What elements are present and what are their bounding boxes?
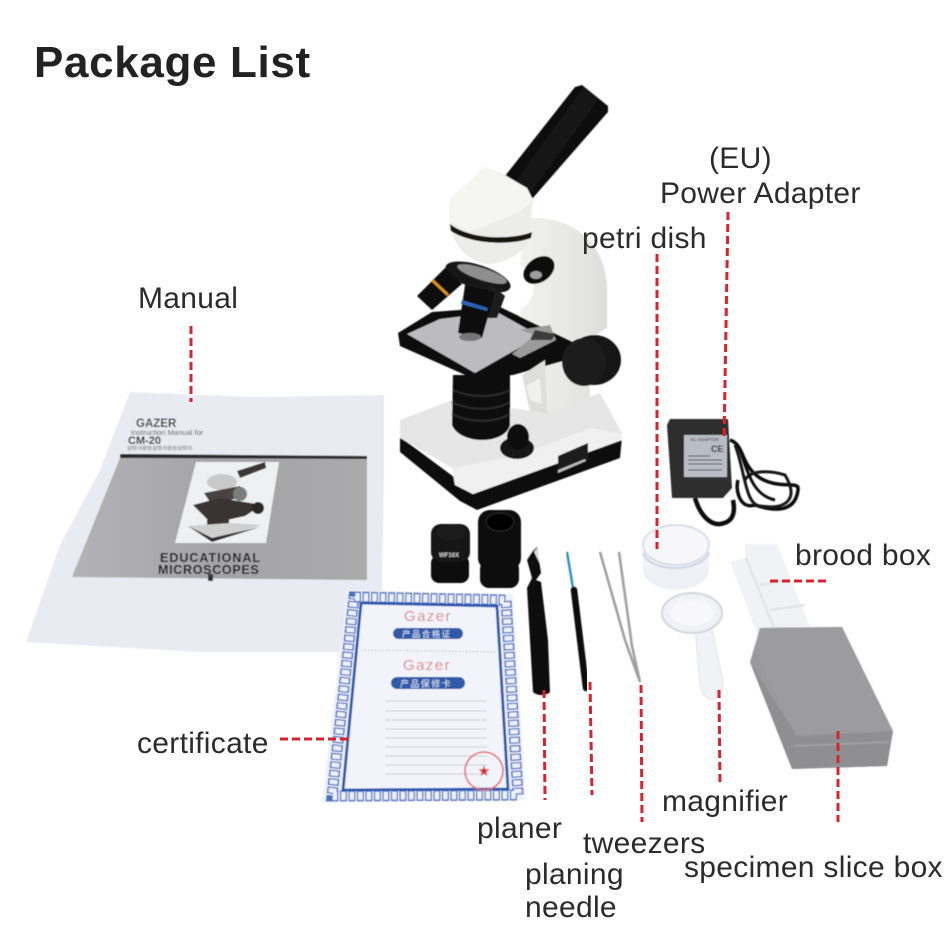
label: planing needle: planing <box>525 858 624 891</box>
certificate: Gazer <box>404 608 452 625</box>
label: EU Power Adapter: (EU) <box>709 142 772 175</box>
label: planing needle: needle <box>525 891 617 924</box>
microscope <box>398 85 622 510</box>
leader: brood box <box>770 580 826 582</box>
side knob small <box>518 250 560 290</box>
manual booklet: MICROSCOPES <box>158 563 259 577</box>
magnifier <box>662 593 723 699</box>
eyepieces <box>431 510 521 588</box>
petri dish <box>643 525 709 590</box>
planer tool <box>527 547 550 695</box>
head <box>450 167 533 264</box>
leader: power adapter <box>724 212 728 440</box>
leader: magnifier <box>719 690 720 785</box>
objectives <box>417 268 462 310</box>
manual booklet: 说明书使用说明书使用说明书 <box>127 445 192 452</box>
certificate <box>322 590 526 803</box>
planing needle <box>567 552 586 688</box>
stage clip <box>512 325 556 358</box>
slider white <box>522 360 548 420</box>
eyepieces: WF16X <box>439 553 459 559</box>
manual booklet: Instruction Manual for <box>131 428 204 437</box>
specimen slice box <box>750 627 893 769</box>
label: planer: planer <box>477 812 562 845</box>
base knob <box>500 437 534 459</box>
tweezers <box>600 552 640 682</box>
leader: Manual <box>190 326 192 402</box>
title: Package List <box>34 38 311 87</box>
label: specimen slice box: specimen slice box <box>684 851 943 884</box>
leader: tweezers <box>641 685 642 822</box>
stage <box>398 307 575 378</box>
label: brood box: brood box <box>795 539 931 572</box>
power adapter <box>667 419 798 524</box>
certificate: Gazer <box>403 657 451 674</box>
power adapter: CE <box>711 444 724 454</box>
leader: certificate <box>280 738 348 740</box>
ribbed column <box>452 375 510 440</box>
manual cover microscope <box>188 462 266 542</box>
base top <box>400 393 622 494</box>
certificate: 产品合格证 <box>402 629 452 639</box>
focus knob <box>567 335 621 385</box>
manual booklet: GAZER <box>136 418 177 430</box>
eyepiece tube <box>505 85 608 199</box>
label: magnifier: magnifier <box>662 785 788 818</box>
label: EU Power Adapter: Power Adapter <box>660 177 861 210</box>
leader: petri dish <box>656 254 658 549</box>
power adapter: AC ADAPTOR <box>690 437 720 442</box>
nosepiece <box>442 255 514 299</box>
arm <box>520 218 607 420</box>
leader: planing needle <box>590 682 592 795</box>
brood box <box>730 544 810 634</box>
label: petri dish: petri dish <box>582 222 707 255</box>
leader: planer <box>544 690 545 800</box>
manual booklet <box>26 392 386 652</box>
leader: specimen slice box <box>836 731 840 822</box>
label: tweezers: tweezers <box>583 827 705 860</box>
certificate: 产品保修卡 <box>400 678 452 689</box>
label: Manual: Manual <box>138 282 238 315</box>
certificate: ★ <box>478 764 490 778</box>
manual booklet: CM-20 <box>128 435 161 447</box>
base switch <box>558 443 588 472</box>
base underside <box>400 437 622 510</box>
label: certificate: certificate <box>137 727 269 760</box>
manual booklet: EDUCATIONAL <box>160 551 261 565</box>
